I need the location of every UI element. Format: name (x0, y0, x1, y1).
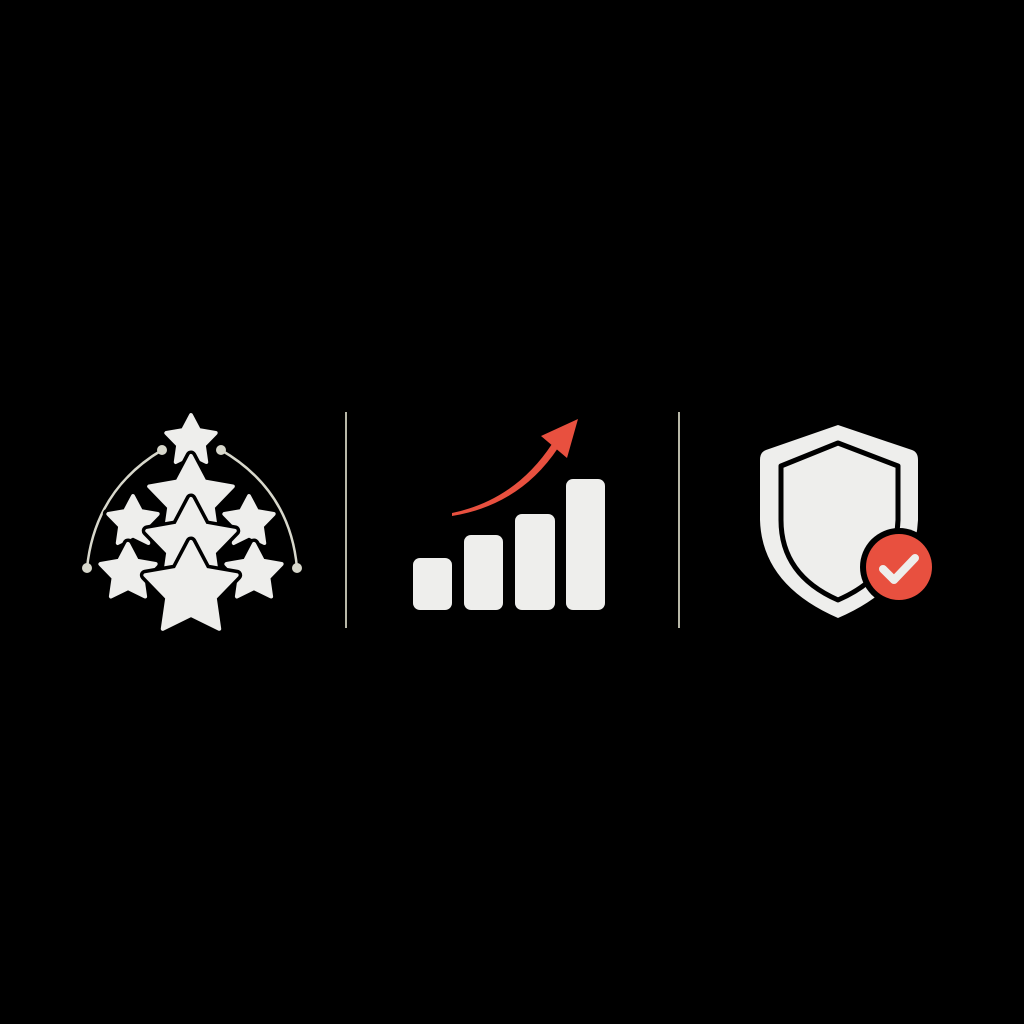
icon: check badge (860, 528, 938, 606)
icon: growth bar chart (413, 419, 605, 610)
arrow: upward trend (452, 419, 578, 516)
icon: shield with check (760, 425, 938, 618)
icon: star cluster (82, 415, 302, 629)
